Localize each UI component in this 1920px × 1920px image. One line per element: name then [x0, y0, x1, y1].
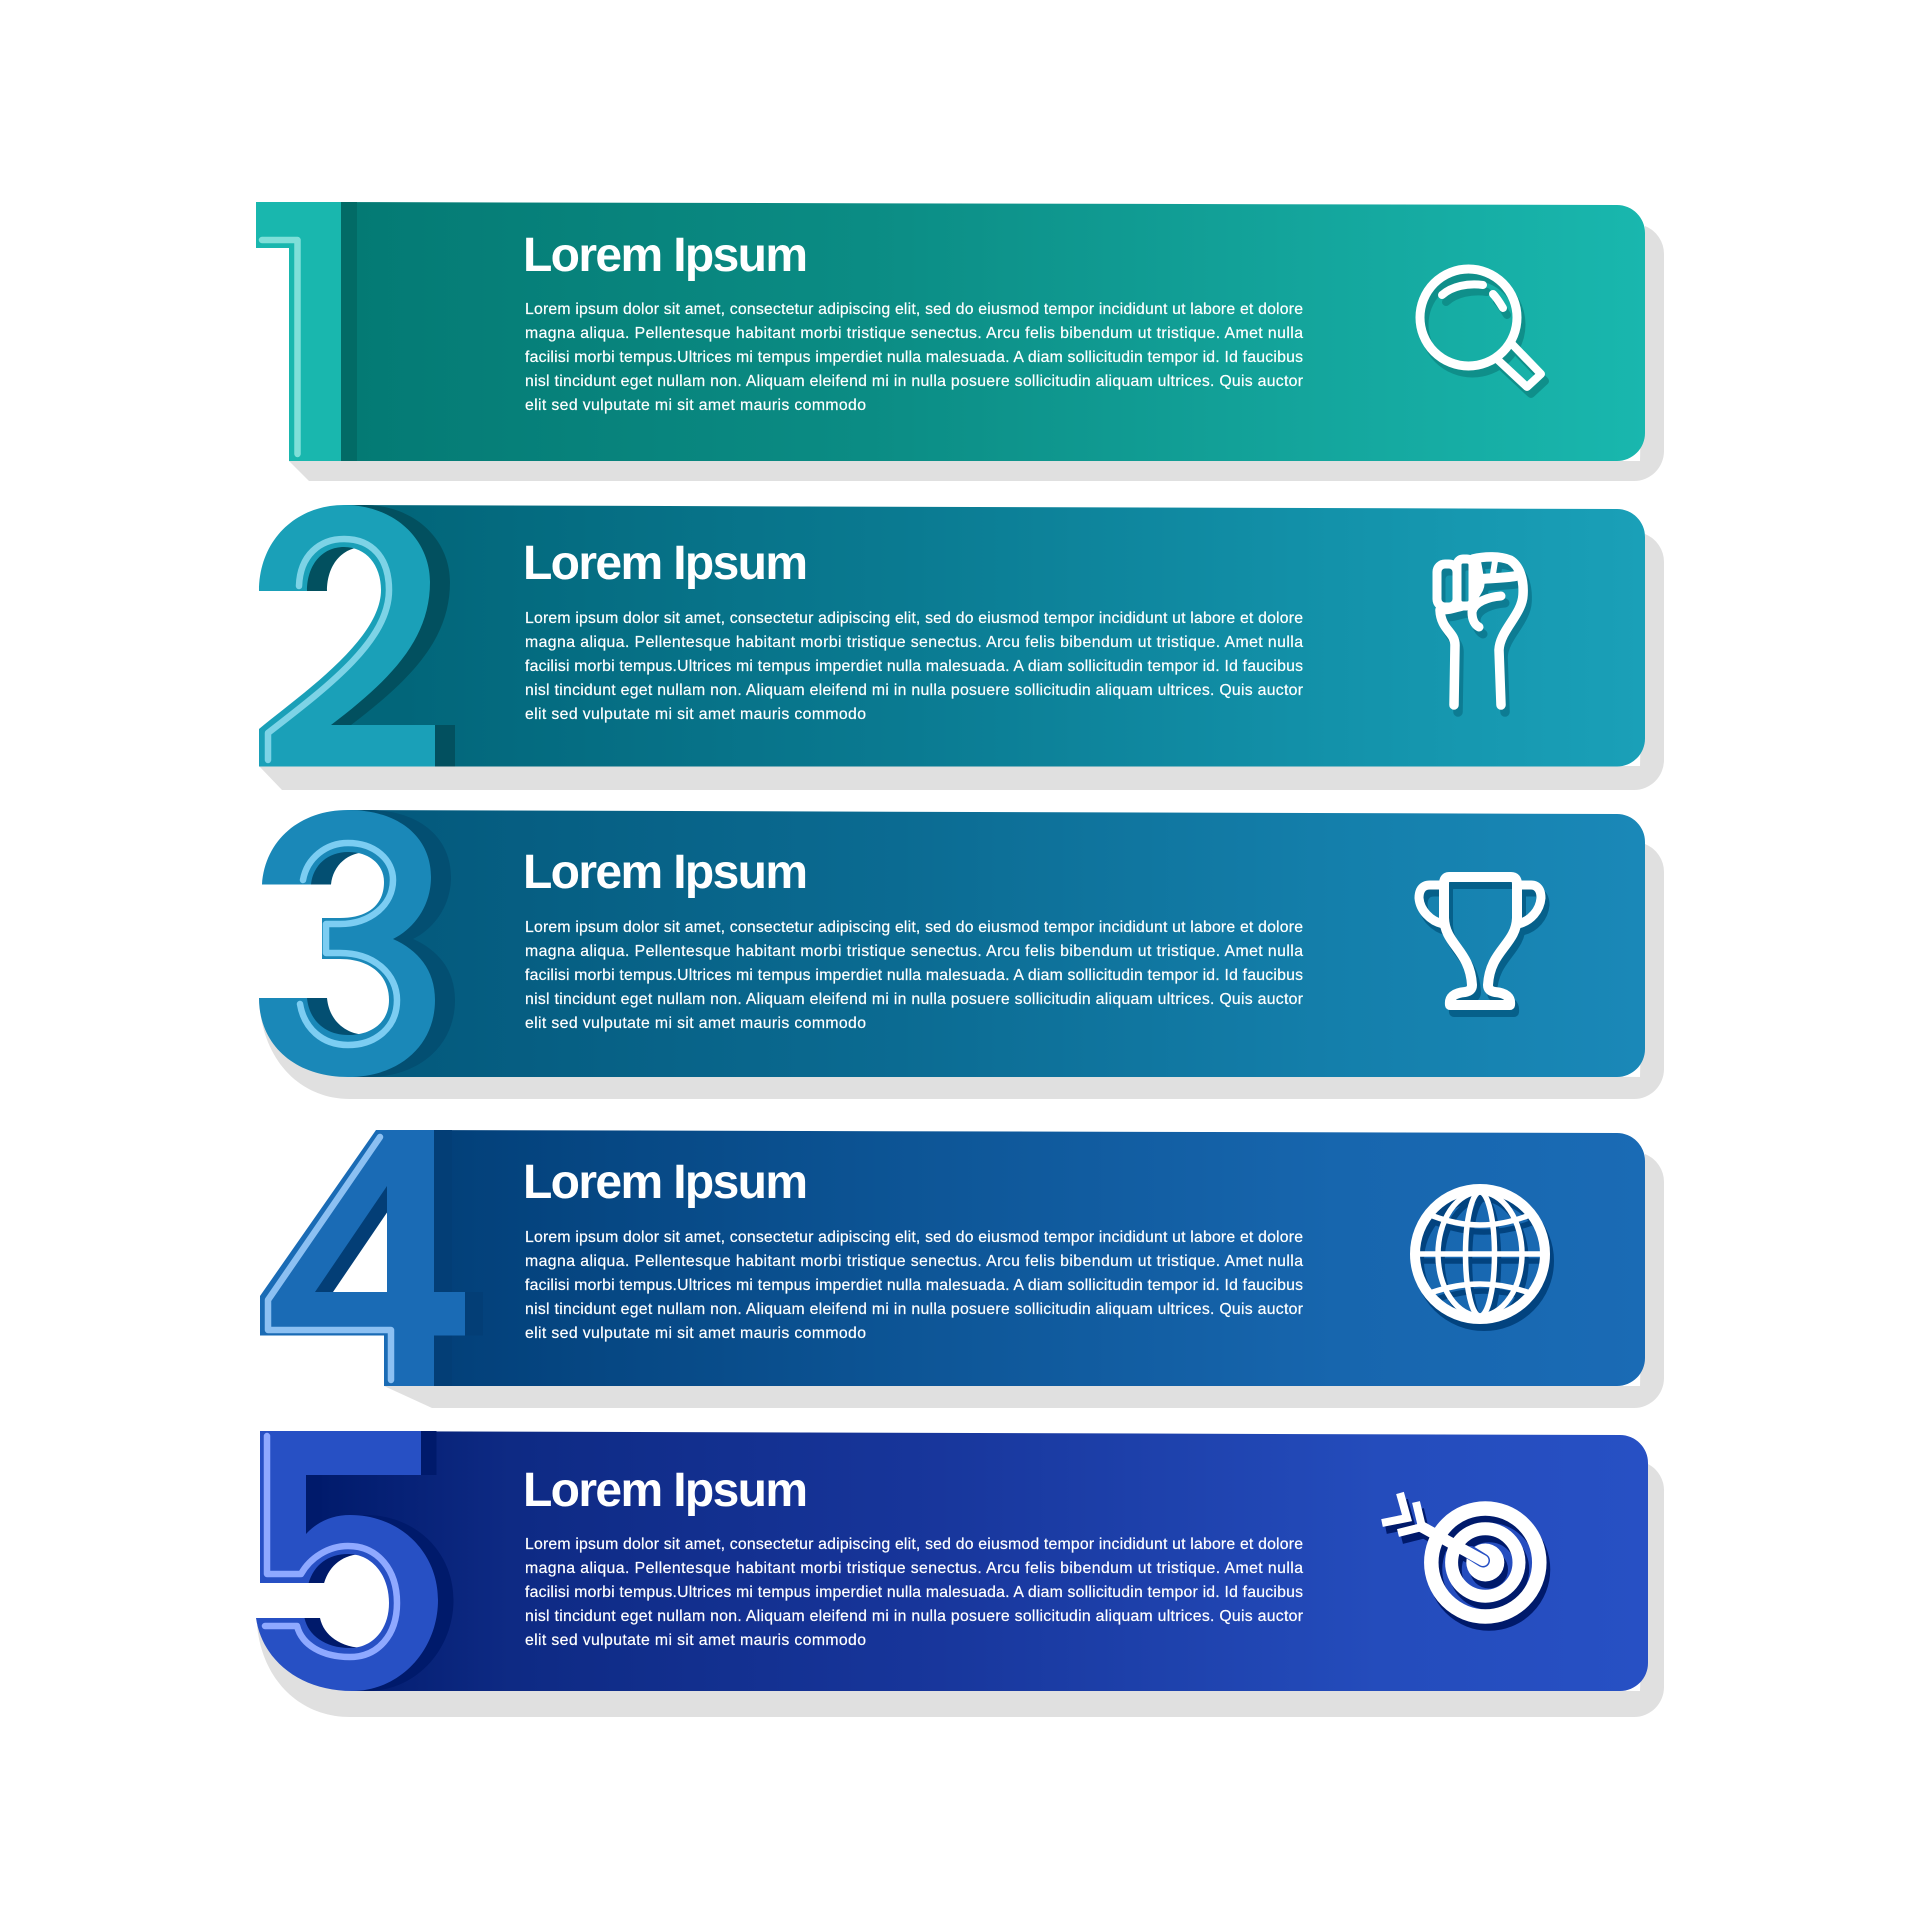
panel 5 body text: elit sed vulputate mi sit amet mauris commodo [525, 1632, 866, 1649]
panel 3 body text [525, 919, 1303, 1032]
panel 3 body text: magna aliqua. Pellentesque habitant morbi tristique senectus. Arcu felis bibendum ut tristique. Amet nulla [525, 943, 1303, 960]
panel 3 body text: nisl tincidunt eget nullam non. Aliquam eleifend mi in nulla posuere sollicitudin aliquam ultrices. Quis auctor [525, 991, 1303, 1008]
panel 2 gradient band [340, 505, 1645, 766]
panel 3 body text: Lorem ipsum dolor sit amet, consectetur adipiscing elit, sed do eiusmod tempor incididunt ut labore et dolore [525, 919, 1303, 936]
icon: globe [1415, 1189, 1549, 1326]
panel 5 body text: Lorem ipsum dolor sit amet, consectetur adipiscing elit, sed do eiusmod tempor incididunt ut labore et dolore [525, 1536, 1303, 1553]
icon: trophy [1419, 877, 1545, 1012]
icon: raised fist [1437, 557, 1527, 712]
panel 1: step one [256, 202, 1664, 481]
panel 4 heading: Lorem Ipsum [523, 1156, 808, 1209]
icon: target with arrow [1382, 1493, 1543, 1624]
panel 3 heading: Lorem Ipsum [523, 846, 808, 899]
panel 1 body text: facilisi morbi tempus.Ultrices mi tempus imperdiet nulla malesuada. A diam sollicitudin tempor id. Id faucibus [525, 349, 1303, 366]
panel 2 body text: Lorem ipsum dolor sit amet, consectetur adipiscing elit, sed do eiusmod tempor incididunt ut labore et dolore [525, 610, 1303, 627]
panel 5: step five [256, 1431, 1664, 1717]
panel 5 body text: nisl tincidunt eget nullam non. Aliquam eleifend mi in nulla posuere sollicitudin aliquam ultrices. Quis auctor [525, 1608, 1303, 1625]
panel 5 body text: magna aliqua. Pellentesque habitant morbi tristique senectus. Arcu felis bibendum ut tristique. Amet nulla [525, 1560, 1303, 1577]
panel 4 body text: nisl tincidunt eget nullam non. Aliquam eleifend mi in nulla posuere sollicitudin aliquam ultrices. Quis auctor [525, 1301, 1303, 1318]
panel 2 drop shadow [259, 534, 1664, 790]
panel 4 body text: Lorem ipsum dolor sit amet, consectetur adipiscing elit, sed do eiusmod tempor incididunt ut labore et dolore [525, 1229, 1303, 1246]
panel 3 body text: elit sed vulputate mi sit amet mauris commodo [525, 1015, 866, 1032]
panel 5 drop shadow [257, 1464, 1664, 1717]
panel 4 drop shadow [384, 1154, 1664, 1408]
icon: magnifying glass [1420, 269, 1545, 394]
panel 5 heading: Lorem Ipsum [523, 1464, 808, 1517]
panel 3: step three [259, 810, 1664, 1099]
panel 1 gradient band [300, 202, 1645, 461]
panel 4: step four [260, 1130, 1664, 1408]
panel 1 body text [525, 301, 1303, 414]
panel 2 body text [525, 610, 1303, 723]
numeral 3 [259, 810, 455, 1077]
panel 4 gradient band [410, 1130, 1645, 1386]
panel 1 body text: elit sed vulputate mi sit amet mauris commodo [525, 397, 866, 414]
panel 3 gradient band [348, 810, 1645, 1077]
panel 2 heading: Lorem Ipsum [523, 537, 808, 590]
numeral 5 [256, 1431, 454, 1691]
numeral 2 [259, 505, 455, 766]
panel 2: step two [259, 505, 1664, 790]
panel 5 body text: facilisi morbi tempus.Ultrices mi tempus imperdiet nulla malesuada. A diam sollicitudin tempor id. Id faucibus [525, 1584, 1303, 1601]
panel 5 gradient band [300, 1431, 1648, 1691]
panel 2 body text: elit sed vulputate mi sit amet mauris commodo [525, 706, 866, 723]
panel 1 body text: magna aliqua. Pellentesque habitant morbi tristique senectus. Arcu felis bibendum ut tristique. Amet nulla [525, 325, 1303, 342]
panel 2 body text: magna aliqua. Pellentesque habitant morbi tristique senectus. Arcu felis bibendum ut tristique. Amet nulla [525, 634, 1303, 651]
panel 3 body text: facilisi morbi tempus.Ultrices mi tempus imperdiet nulla malesuada. A diam sollicitudin tempor id. Id faucibus [525, 967, 1303, 984]
panel 1 drop shadow [289, 226, 1664, 481]
panel 4 body text: magna aliqua. Pellentesque habitant morbi tristique senectus. Arcu felis bibendum ut tristique. Amet nulla [525, 1253, 1303, 1270]
panel 5 body text [525, 1536, 1303, 1649]
panel 1 heading: Lorem Ipsum [523, 229, 808, 282]
numeral 1 [256, 202, 357, 461]
panel 1 body text: nisl tincidunt eget nullam non. Aliquam eleifend mi in nulla posuere sollicitudin aliquam ultrices. Quis auctor [525, 373, 1303, 390]
panel 1 body text: Lorem ipsum dolor sit amet, consectetur adipiscing elit, sed do eiusmod tempor incididunt ut labore et dolore [525, 301, 1303, 318]
numeral 4 [260, 1130, 483, 1386]
panel 4 body text [525, 1229, 1303, 1342]
panel 2 body text: facilisi morbi tempus.Ultrices mi tempus imperdiet nulla malesuada. A diam sollicitudin tempor id. Id faucibus [525, 658, 1303, 675]
panel 3 drop shadow [259, 844, 1664, 1099]
panel 4 body text: facilisi morbi tempus.Ultrices mi tempus imperdiet nulla malesuada. A diam sollicitudin tempor id. Id faucibus [525, 1277, 1303, 1294]
panel 2 body text: nisl tincidunt eget nullam non. Aliquam eleifend mi in nulla posuere sollicitudin aliquam ultrices. Quis auctor [525, 682, 1303, 699]
panel 4 body text: elit sed vulputate mi sit amet mauris commodo [525, 1325, 866, 1342]
